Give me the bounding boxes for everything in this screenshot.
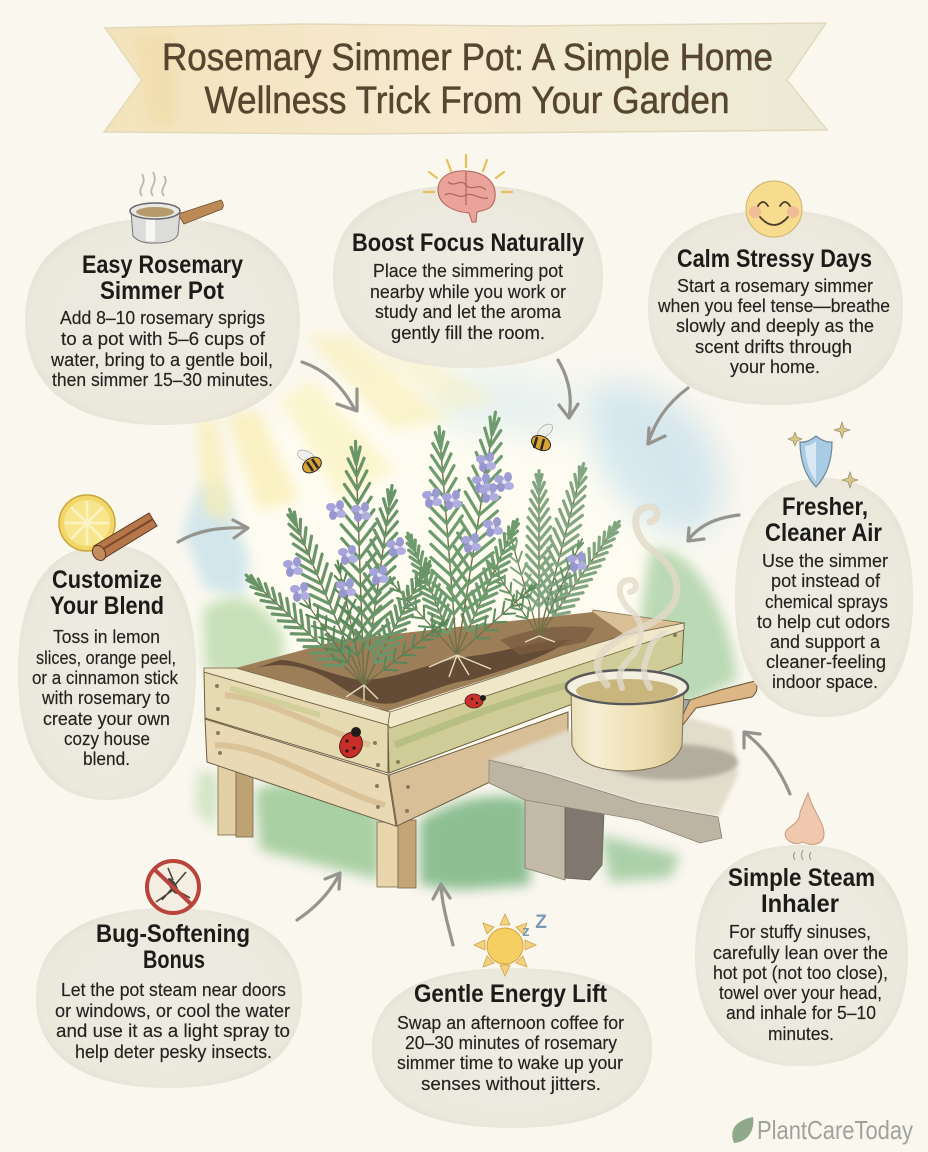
text block: pot instead of	[771, 571, 881, 591]
heading: Boost Focus Naturally	[352, 229, 584, 257]
text block: nearby while you work or	[370, 282, 566, 302]
heading: Easy Rosemary	[82, 251, 243, 279]
text block	[370, 261, 566, 343]
arrow: focus to plants	[558, 360, 578, 418]
text block: or a cinnamon stick	[32, 668, 179, 688]
text block: your home.	[730, 357, 820, 377]
heading	[82, 251, 243, 305]
text block: cozy house	[64, 729, 150, 749]
text block: slices, orange peel,	[36, 648, 176, 668]
text block	[713, 922, 888, 1044]
panel: calm stressy days	[648, 181, 903, 405]
text block: when you feel tense—breathe	[657, 296, 890, 316]
heading: Bonus	[143, 946, 205, 974]
text block: to a pot with 5–6 cups of	[61, 329, 266, 349]
panel: boost focus naturally	[333, 155, 603, 368]
top rim left	[204, 668, 390, 725]
heading: Customize	[52, 566, 162, 594]
panel: bug-softening bonus	[36, 861, 302, 1088]
text block: 20–30 minutes of rosemary	[405, 1033, 617, 1053]
arrow: bug bonus to planter	[297, 873, 340, 920]
text block: simmer time to wake up your	[397, 1053, 623, 1073]
bee left	[296, 448, 324, 476]
soil	[236, 612, 625, 712]
text block: then simmer 15–30 minutes.	[52, 370, 273, 390]
ladybug on rim	[465, 694, 486, 708]
text block: slowly and deeply as the	[676, 316, 874, 336]
raised wooden planter box	[204, 610, 684, 888]
text block: Toss in lemon	[53, 627, 160, 647]
lavender flowers	[283, 452, 587, 602]
roots	[346, 636, 555, 701]
bee right	[529, 421, 555, 454]
heading: Inhaler	[761, 890, 839, 918]
heading	[50, 566, 164, 620]
icon: glowing brain	[424, 155, 512, 222]
icon: sleepy sun: Z	[535, 912, 547, 933]
text block: Swap an afternoon coffee for	[397, 1013, 624, 1033]
heading: Fresher,	[782, 493, 868, 521]
text block: blend.	[83, 749, 130, 769]
text block: Use the simmer	[762, 551, 888, 571]
text block: cleaner-feeling	[766, 652, 886, 672]
text block	[397, 1013, 624, 1094]
icon: lemon and cinnamon	[59, 495, 157, 563]
heading: Cleaner Air	[765, 519, 882, 547]
text block	[757, 551, 890, 692]
text block	[50, 308, 273, 390]
text block: study and let the aroma	[375, 302, 562, 322]
text block: with rosemary to	[41, 688, 170, 708]
top rim right	[388, 623, 684, 728]
heading	[765, 493, 882, 547]
text block: senses without jitters.	[421, 1074, 601, 1094]
panel: customize your blend	[18, 495, 196, 800]
text block: water, bring to a gentle boil,	[50, 350, 273, 370]
text block: scent drifts through	[695, 337, 852, 357]
text block	[55, 980, 290, 1062]
text block: minutes.	[768, 1024, 834, 1044]
text block: indoor space.	[772, 672, 878, 692]
text block: and support a	[770, 632, 881, 652]
plant A	[237, 441, 453, 694]
arrow: pot to plants	[302, 362, 357, 411]
text block	[657, 276, 890, 377]
arrow: inhaler to pot	[744, 732, 790, 794]
icon: sleepy sun	[474, 912, 547, 976]
text block: Add 8–10 rosemary sprigs	[60, 308, 265, 328]
text block: For stuffy sinuses,	[729, 922, 871, 942]
panel: gentle energy lift	[372, 912, 652, 1128]
text block: and use it as a light spray to	[56, 1021, 290, 1041]
title text	[162, 37, 773, 122]
text block: carefully lean over the	[713, 943, 888, 963]
text block: to help cut odors	[757, 612, 890, 632]
icon: shield with sparkles	[788, 422, 858, 488]
heading: Bug-Softening	[96, 920, 250, 948]
title text: Wellness Trick From Your Garden	[204, 80, 730, 122]
text block: Place the simmering pot	[373, 261, 563, 281]
text block: create your own	[43, 709, 170, 729]
text block: Start a rosemary simmer	[677, 276, 873, 296]
legs	[218, 765, 416, 888]
heading: Simple Steam	[728, 864, 875, 892]
arrow: calm to plants	[648, 388, 688, 444]
plant C	[483, 460, 628, 642]
icon: nose	[785, 793, 824, 860]
arrow: air to steam	[688, 515, 739, 541]
rosemary plants	[237, 409, 628, 701]
text block: chemical sprays	[765, 592, 888, 612]
saucepan on the slab	[566, 670, 757, 771]
text block: Let the pot steam near doors	[61, 980, 286, 1000]
heading: Gentle Energy Lift	[414, 980, 608, 1008]
title banner	[104, 23, 827, 134]
panel: simple steam inhaler	[695, 793, 908, 1066]
rising steam	[597, 507, 677, 688]
title text: Rosemary Simmer Pot: A Simple Home	[162, 37, 773, 79]
heading	[728, 864, 875, 918]
text block: and inhale for 5–10	[726, 1003, 876, 1023]
arrow: blend to plants	[178, 520, 248, 542]
watercolor garden backdrop	[183, 335, 737, 890]
plant B	[379, 409, 542, 662]
icon: small saucepan	[130, 172, 223, 243]
heading: Calm Stressy Days	[677, 245, 872, 273]
heading	[96, 920, 250, 974]
text block: towel over your head,	[719, 983, 882, 1003]
right face	[388, 623, 684, 773]
text block	[32, 627, 179, 769]
text block: or windows, or cool the water	[55, 1001, 290, 1021]
text block: hot pot (not too close),	[713, 963, 888, 983]
icon: sleepy sun: z	[522, 923, 530, 940]
panel: fresher cleaner air	[735, 422, 913, 717]
text block: help deter pesky insects.	[75, 1042, 272, 1062]
icon: no mosquito sign	[147, 861, 199, 913]
panel: easy rosemary simmer pot	[25, 172, 300, 425]
heading: Simmer Pot	[100, 277, 225, 305]
icon: smiling face	[746, 181, 802, 237]
stone slab bench	[489, 718, 738, 880]
arrow: energy to planter	[433, 884, 453, 945]
text block: gently fill the room.	[391, 323, 545, 343]
rivets	[215, 633, 677, 813]
front left face	[204, 672, 388, 773]
ladybug on front	[336, 727, 366, 761]
heading: Your Blend	[50, 592, 164, 620]
back rim	[590, 610, 684, 640]
